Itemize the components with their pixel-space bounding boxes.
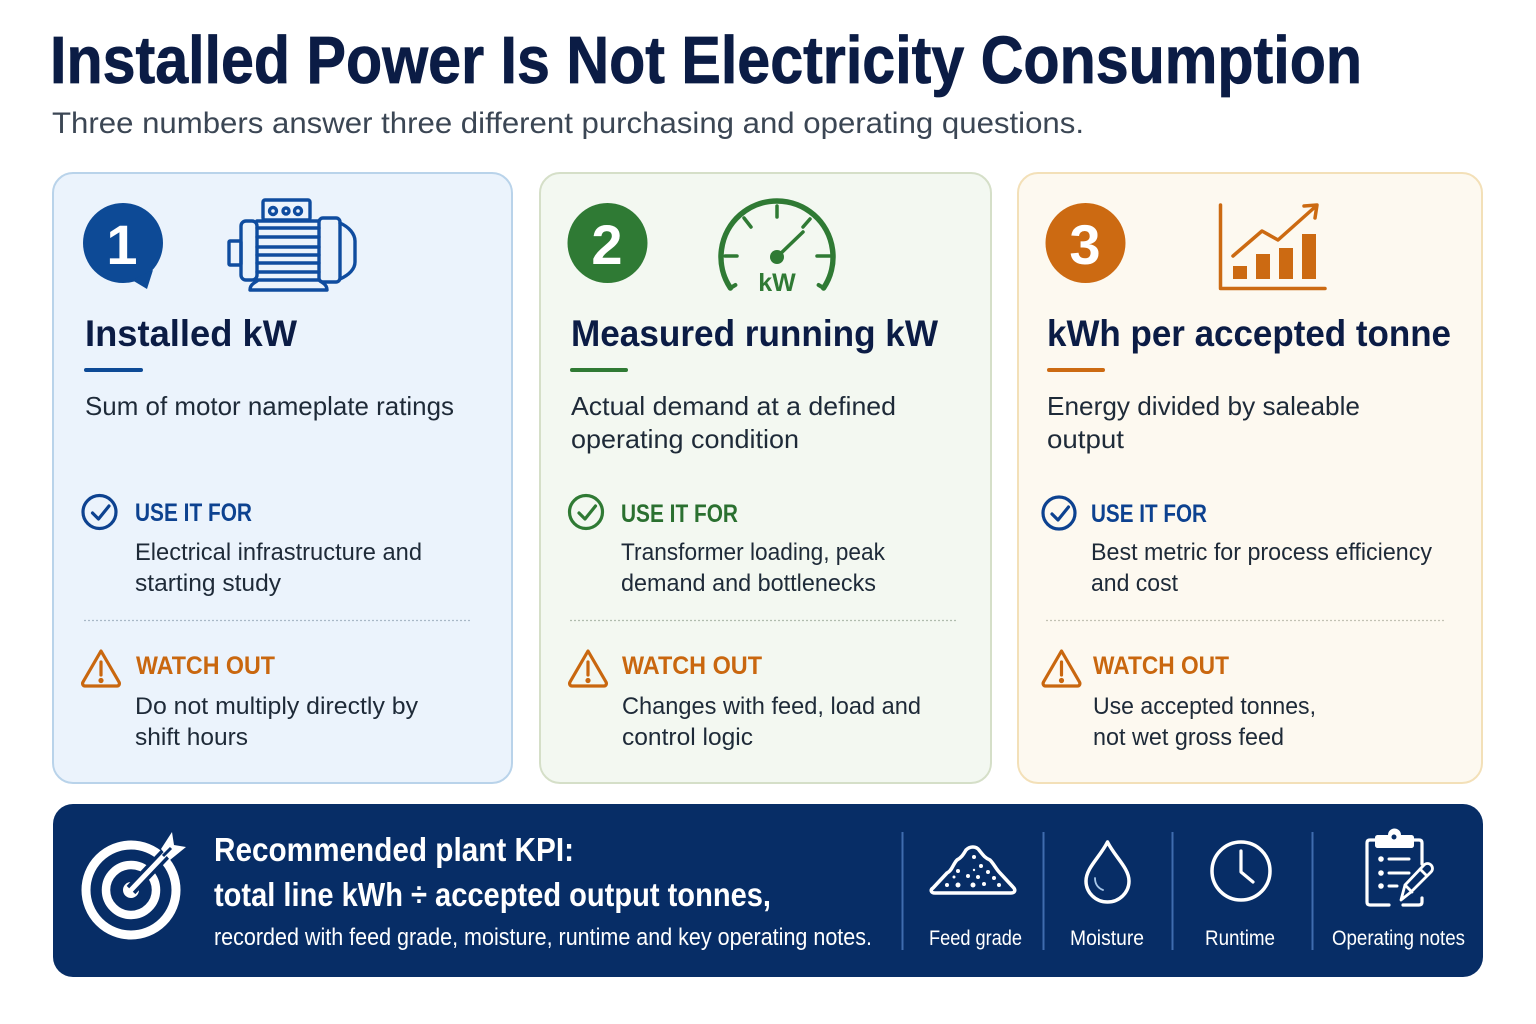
- use text: Electrical infrastructure and: [135, 539, 422, 566]
- label: Runtime: [1205, 927, 1275, 950]
- use text: [1091, 539, 1432, 597]
- use text: and cost: [1091, 570, 1178, 597]
- watch text: [622, 693, 921, 751]
- icon: clipboard and pencil: [1367, 829, 1432, 905]
- icon: gauge: kW: [758, 269, 796, 297]
- item: operating notes: [1332, 829, 1465, 950]
- icon: ore pile: [931, 847, 1015, 893]
- panel: installed kW: [53, 173, 512, 783]
- description: [571, 391, 896, 454]
- icon: gauge: [721, 201, 833, 297]
- watch label: WATCH OUT: [136, 652, 275, 680]
- use text: [135, 539, 422, 597]
- watch text: not wet gross feed: [1093, 724, 1284, 751]
- watch text: Use accepted tonnes,: [1093, 693, 1316, 720]
- heading: Measured running kW: [571, 313, 938, 354]
- use label: USE IT FOR: [135, 499, 252, 527]
- use it for block: [83, 496, 422, 597]
- use text: demand and bottlenecks: [621, 570, 876, 597]
- badge 1: 1: [106, 213, 138, 276]
- item: runtime: [1205, 842, 1275, 950]
- panel background: [540, 173, 991, 783]
- label: Feed grade: [929, 927, 1022, 950]
- banner background: [53, 804, 1483, 977]
- icon: warning: [83, 651, 119, 686]
- badge 1: [83, 203, 163, 289]
- description: Sum of motor nameplate ratings: [85, 391, 454, 421]
- item: feed grade: [929, 847, 1022, 950]
- icon: check: [570, 496, 602, 528]
- icon: check: [83, 496, 116, 528]
- label: Moisture: [1070, 927, 1144, 950]
- heading: kWh per accepted tonne: [1047, 313, 1451, 354]
- badge 3: [1046, 203, 1126, 283]
- badge 2: [568, 203, 648, 283]
- watch text: control logic: [622, 724, 753, 751]
- description: [1047, 391, 1360, 454]
- watch text: [135, 693, 418, 751]
- description: Actual demand at a defined: [571, 391, 896, 421]
- title: Installed Power Is Not Electricity Consumption: [50, 23, 1362, 98]
- panel background: [1018, 173, 1482, 783]
- watch text: shift hours: [135, 724, 248, 751]
- KPI text: [214, 831, 872, 951]
- watch out block: [1043, 651, 1316, 751]
- description: Energy divided by saleable: [1047, 391, 1360, 421]
- banner: recommended plant KPI: [53, 804, 1483, 977]
- watch out block: [570, 651, 921, 751]
- accent rule: [570, 368, 628, 372]
- icon: electric motor: [229, 200, 355, 290]
- watch text: Do not multiply directly by: [135, 693, 418, 720]
- use text: [621, 539, 886, 597]
- badge 3: 3: [1069, 213, 1101, 276]
- icon: water drop: [1086, 842, 1129, 902]
- icon: warning: [1043, 651, 1080, 686]
- use label: USE IT FOR: [1091, 500, 1207, 528]
- subtitle: Three numbers answer three different purchasing and operating questions.: [52, 107, 1084, 140]
- KPI text: total line kWh ÷ accepted output tonnes,: [214, 876, 771, 913]
- icon: check: [1043, 497, 1075, 529]
- description: output: [1047, 424, 1125, 454]
- icon: rising chart: [1220, 205, 1325, 288]
- use text: Transformer loading, peak: [621, 539, 886, 566]
- KPI text: Recommended plant KPI:: [214, 831, 574, 868]
- watch out block: [83, 651, 418, 751]
- panel: kWh per accepted tonne: [1018, 173, 1482, 783]
- panel background: [53, 173, 512, 783]
- use label: USE IT FOR: [621, 500, 738, 528]
- icon: clock: [1212, 842, 1270, 900]
- heading: Installed kW: [85, 313, 297, 354]
- watch text: Changes with feed, load and: [622, 693, 921, 720]
- icon: target: [86, 832, 186, 935]
- item: moisture: [1070, 842, 1144, 950]
- watch label: WATCH OUT: [1093, 652, 1229, 680]
- label: Operating notes: [1332, 927, 1465, 950]
- icon: warning: [570, 651, 606, 686]
- description: operating condition: [571, 424, 799, 454]
- panel: measured running kW: [540, 173, 991, 783]
- accent rule: [84, 368, 143, 372]
- use text: starting study: [135, 570, 281, 597]
- KPI text: recorded with feed grade, moisture, runtime and key operating notes.: [214, 924, 872, 951]
- use text: Best metric for process efficiency: [1091, 539, 1432, 566]
- use it for block: [570, 496, 886, 597]
- badge 2: 2: [591, 213, 623, 276]
- accent rule: [1047, 368, 1105, 372]
- watch text: [1093, 693, 1316, 751]
- watch label: WATCH OUT: [622, 652, 762, 680]
- use it for block: [1043, 497, 1432, 597]
